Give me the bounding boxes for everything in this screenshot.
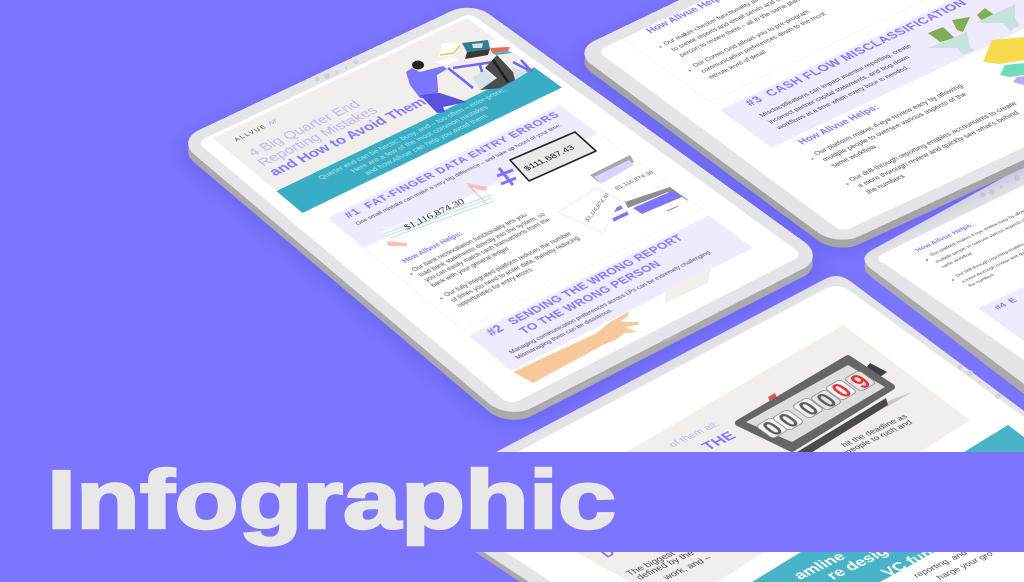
text: 4-eye bullet: Our platform makes 4-eye review easy by allowing [812,83,965,156]
text: 4-eye bullet: multiple people to oversee various aspects of the [820,91,969,162]
panel: #4 heading on right tablet [978,287,1024,341]
text: #3 description: workflows at a time when every hour is needed. [774,64,911,131]
panel: #3 lavender [720,0,1024,148]
text: right tablet how allvue helps [914,206,1024,288]
icon: countdown timer: 0 [756,417,789,440]
illustration: notepad with handwriting: $1,116,874.30 [401,198,468,232]
panel: #2 lavender [469,215,753,371]
icon: countdown timer: 9 [844,370,877,393]
heading: #2 wrong report: TO THE WRONG PERSON [516,258,664,336]
heading: infographic: Infographic [47,453,616,546]
illustration: upper browser window [590,155,660,200]
heading: #2 wrong report: SENDING THE WRONG REPORT [504,232,686,327]
text: drill-through bullet: Our drill-through reporting enables accountants to create [847,100,1019,182]
title: Reporting Mistakes [254,104,382,169]
illustration: lower browser window [625,187,688,214]
tablet: top right body side [580,52,1024,251]
text: reconciliation bullet: Our bank reconciliation functionality lets you [410,212,529,273]
text: the heading: THE [698,429,740,453]
text: #2 description: Managing communication preferences across LPs can be extremely challenging. [507,249,714,355]
tablet: top right screen [584,0,1024,240]
panel: teal intro band: Quarter end can be hectic, busy, and – too often – error-prone. [317,87,509,181]
panel: #1 lavender [327,105,597,248]
text: #2 description: Mismanaging them can be disastrous. [514,307,615,360]
text: drill-through bullet: a more thorough review and quickly see what's behind [855,110,1021,189]
text: right tablet how allvue helps: How Allvue Helps: [914,222,976,253]
text: integrated platform bullet: opportunities for entry errors [455,267,534,308]
text: lower left copy: work, and – [659,553,714,582]
text: right tablet how allvue helps: the numbers [967,273,997,288]
heading: #2 number: #2 [483,323,507,338]
panel: #4 heading on right tablet: #4 E [992,296,1019,311]
icon: countdown timer: 0 [792,397,825,420]
text: right tablet how allvue helps: same workflow [940,251,975,269]
text: reconciliation bullet: you can easily match cash transactions from the [423,217,552,283]
illustration: notepad with handwriting [380,183,495,246]
callout: correct amount box: $111,687.43 [521,144,577,172]
text: deadline copy: people to rush and [842,418,915,455]
title: and How to Avoid Them [266,96,430,178]
text: teal call to action: VC fund [878,542,947,579]
text: of them all: of them all: [667,420,722,449]
text: right of teal: harge your gro [934,550,995,581]
panel: teal band [752,425,1024,582]
text: lower left copy: The biggest [623,549,678,577]
speaker grilles [553,336,677,402]
icon: countdown timer: 0 [772,409,805,432]
illustration: handwritten paper: $1,116,874.30 [584,192,611,223]
text: integrated platform bullet: of times you need to enter data, thereby reducing [449,235,581,303]
text: reconciliation bullet: load bank statements directly into the system, so [416,211,547,278]
text: teal call to action: amline [790,550,850,582]
text: reconciliation bullet: bank with your general ledger [429,246,511,288]
callout: correct amount box [510,132,596,181]
text: #3 description: Misclassifications can impact investor reporting, create [757,43,913,118]
text: right of teal: reporting, and [911,549,970,579]
illustration: paper curl [665,262,712,303]
text: #3 description: incorrect partner capital statements, and bog down [766,54,911,124]
logo: allvue: ALLVUE /\// [232,119,278,142]
text: #3 how allvue helps: How Allvue Helps: [796,103,882,146]
icon: equals sign [608,207,628,220]
camera dots on right tablet [980,175,1020,198]
illustration: handwritten paper [558,188,620,233]
text: lower left copy: D [597,546,619,560]
tablet: main screen [188,8,814,412]
text: #1 description: One small mistake can make a very big difference – and take up hours of your time. [353,122,563,226]
text: comm grid bullet: communication preferences down to the most [698,11,828,74]
tablet: main body side [183,142,818,424]
text: drill-through bullet: the numbers [864,173,907,195]
title: 4 Big Quarter End [245,98,364,159]
panel: teal intro band: Here are a few of the most common mistakes [349,104,491,174]
panel: teal intro band [276,67,562,213]
outline: how allvue helps box [363,132,703,330]
text: lower left copy: defined by the [633,548,696,581]
heading: #1 fat-finger: #1 FAT-FINGER DATA ENTRY ERRORS [341,110,562,220]
illustration: upper browser window: $1,116,874.30 [614,170,656,191]
illustration: stressed person at desk [406,39,532,113]
text: #1 how allvue helps: How Allvue Helps: [400,230,464,264]
panel: header beige [213,18,535,191]
text: comm grid bullet: Our Comm Grid allows you to pre-program [690,9,811,68]
text: deadline copy: hit the deadline as [838,412,910,448]
text: 4-eye bullet: same workflow [829,144,878,169]
illustration: reaching arm [513,312,639,383]
panel: teal intro band: and how Allvue can help you avoid them. [363,113,491,176]
text: comm grid bullet: minute level of detail [706,49,768,80]
text: teal call to action [790,541,947,582]
icon: countdown timer [738,358,912,456]
text: lower left copy [597,546,714,582]
icon: not equal sign [497,168,516,185]
text: teal call to action: re design [823,541,901,582]
banner: purple strip [0,452,1024,552]
camera dots on bottom tablet [958,364,1001,399]
camera dots on main tablet [314,60,358,82]
heading: #3 cash flow misclassification: #3 CASH FLOW MISCLASSIFICATION [742,0,970,108]
panel: beige hero [514,325,970,582]
icon: countdown timer: 0 [825,379,858,402]
text: integrated platform bullet: Our fully integrated platform reduces the number [442,231,573,298]
icon: countdown timer: 0 [810,389,843,412]
